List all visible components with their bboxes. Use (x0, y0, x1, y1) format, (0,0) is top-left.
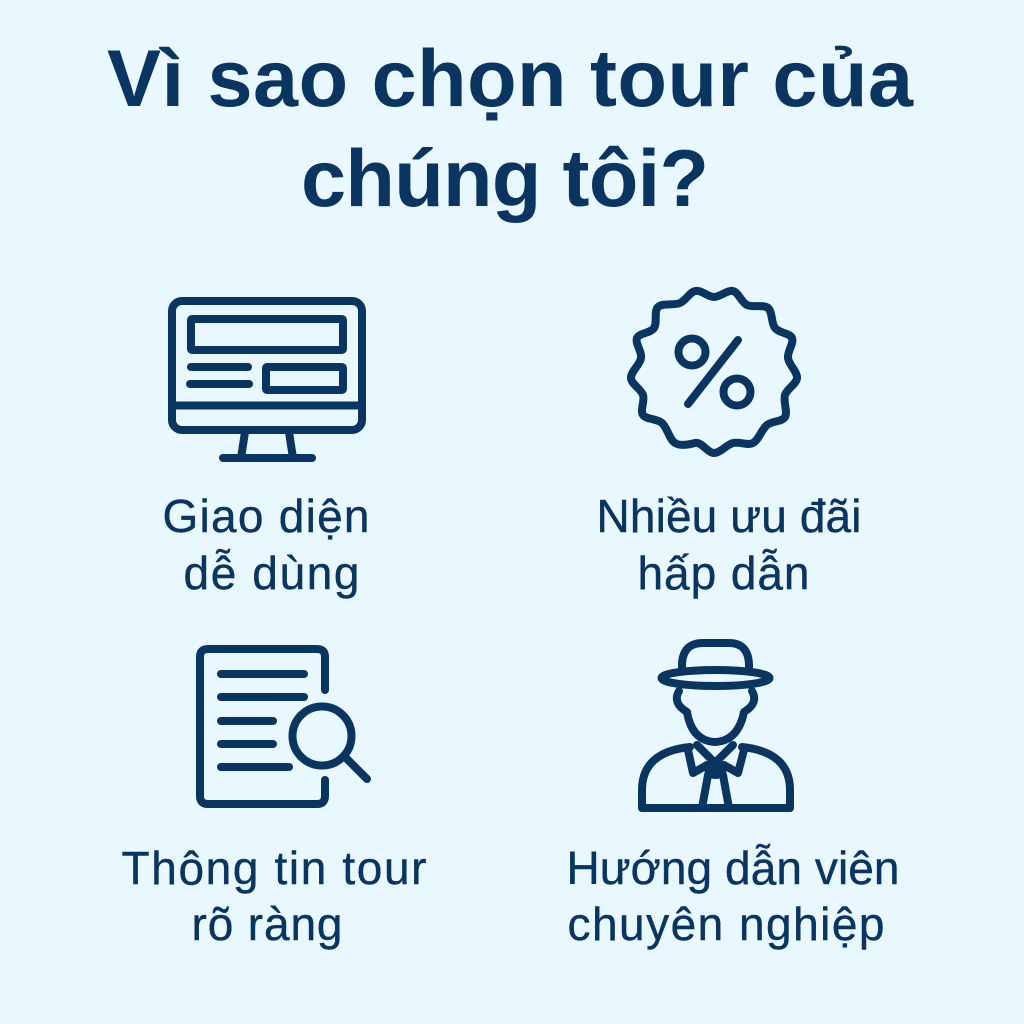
label: clear tour information: rõ ràng (192, 898, 342, 950)
title: Vì sao chọn tour của (107, 34, 914, 124)
panel: attractive deals (596, 291, 862, 599)
icon: document with magnifier (200, 649, 367, 804)
icon: desktop monitor (172, 301, 362, 458)
panel: professional guide (566, 643, 900, 950)
label: attractive deals: Nhiều ưu đãi (596, 490, 862, 542)
panel: clear tour information (122, 649, 426, 950)
label: easy interface: Giao diện (162, 490, 370, 542)
icon: tour guide with hat (642, 643, 790, 808)
panel: easy interface (162, 301, 370, 599)
label: professional guide: Hướng dẫn viên (566, 842, 900, 894)
label: clear tour information (122, 842, 426, 950)
label: attractive deals (596, 490, 862, 599)
label: professional guide (566, 842, 900, 950)
label: easy interface: dễ dùng (184, 547, 360, 599)
label: easy interface (162, 490, 370, 599)
icon: discount badge (631, 291, 797, 453)
label: professional guide: chuyên nghiệp (568, 898, 884, 950)
label: attractive deals: hấp dẫn (638, 547, 810, 599)
title: chúng tôi? (301, 134, 709, 224)
label: clear tour information: Thông tin tour (122, 842, 426, 894)
title (107, 34, 914, 224)
